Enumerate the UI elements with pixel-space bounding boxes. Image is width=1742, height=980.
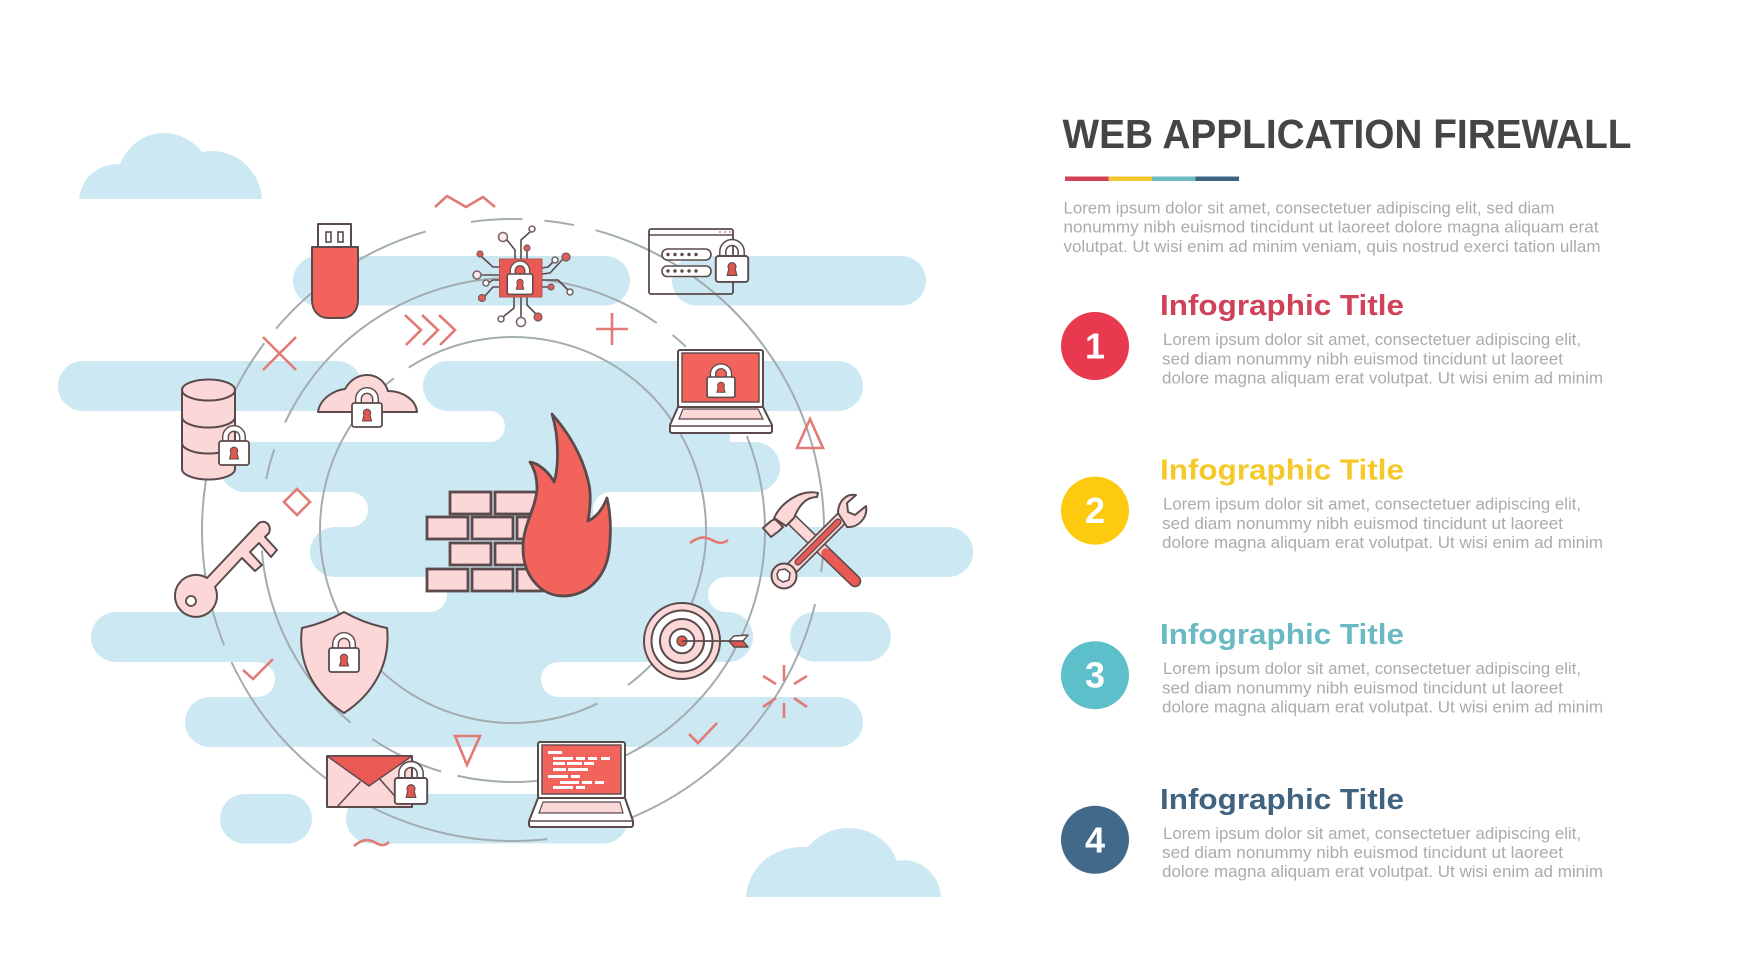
- icon: laptop with lock: [670, 350, 772, 433]
- item 4: sed diam nonummy nibh euismod tincidunt ut laoreet: [1162, 844, 1563, 862]
- item 3: Lorem ipsum dolor sit amet, consectetuer adipiscing elit,: [1163, 660, 1581, 678]
- item 4: Infographic Title: [1160, 784, 1404, 816]
- icon: target with arrow: [644, 603, 748, 679]
- icon: circuit chip with lock: [473, 226, 573, 326]
- item 4: [1061, 784, 1603, 881]
- item 1: sed diam nonummy nibh euismod tincidunt ut laoreet: [1162, 350, 1563, 368]
- icon: laptop with code: [529, 742, 633, 827]
- title underline: [1065, 176, 1239, 181]
- icon: login window with lock: [649, 229, 748, 294]
- item 2: dolore magna aliquam erat volutpat. Ut wisi enim ad minim: [1162, 534, 1603, 552]
- decorative marks: [243, 196, 823, 846]
- intro text: Lorem ipsum dolor sit amet, consectetuer adipiscing elit, sed diam: [1064, 200, 1554, 218]
- item 3: [1061, 619, 1603, 716]
- icon: database with lock: [182, 380, 249, 480]
- item 2: sed diam nonummy nibh euismod tincidunt ut laoreet: [1162, 515, 1563, 533]
- central icon: brick firewall with flame: [427, 414, 610, 596]
- intro text: nonummy nibh euismod tincidunt ut laoreet dolore magna aliquam erat: [1064, 218, 1599, 236]
- item 1: dolore magna aliquam erat volutpat. Ut wisi enim ad minim: [1162, 369, 1603, 387]
- item 1: Infographic Title: [1160, 290, 1404, 322]
- icon: shield with lock: [301, 612, 388, 713]
- icon: usb drive: [312, 224, 358, 318]
- icon: cloud with lock: [318, 375, 417, 427]
- item 1: Lorem ipsum dolor sit amet, consectetuer adipiscing elit,: [1163, 331, 1581, 349]
- item 4: dolore magna aliquam erat volutpat. Ut wisi enim ad minim: [1162, 863, 1603, 881]
- icon: hammer and wrench: [763, 492, 866, 588]
- item 3: Infographic Title: [1160, 619, 1404, 651]
- item 2: Infographic Title: [1160, 455, 1404, 487]
- item 2: [1061, 455, 1603, 552]
- item 3: 3: [1085, 655, 1105, 696]
- background: clouds and pills: [58, 133, 973, 897]
- item 4: 4: [1085, 819, 1105, 860]
- item 3: dolore magna aliquam erat volutpat. Ut wisi enim ad minim: [1162, 698, 1603, 716]
- intro text: volutpat. Ut wisi enim ad minim veniam, quis nostrud exerci tation ullam: [1064, 238, 1600, 256]
- item 2: 2: [1085, 490, 1105, 531]
- item 1: [1061, 290, 1603, 387]
- intro text: [1064, 200, 1600, 256]
- item 3: sed diam nonummy nibh euismod tincidunt ut laoreet: [1162, 680, 1563, 698]
- item 1: 1: [1085, 326, 1105, 366]
- item 2: Lorem ipsum dolor sit amet, consectetuer adipiscing elit,: [1163, 496, 1581, 514]
- icon: envelope with lock: [327, 756, 427, 807]
- title: WEB APPLICATION FIREWALL: [1062, 111, 1632, 157]
- concentric dashed rings: [136, 153, 890, 907]
- icon: key: [175, 522, 277, 617]
- item 4: Lorem ipsum dolor sit amet, consectetuer adipiscing elit,: [1163, 825, 1581, 843]
